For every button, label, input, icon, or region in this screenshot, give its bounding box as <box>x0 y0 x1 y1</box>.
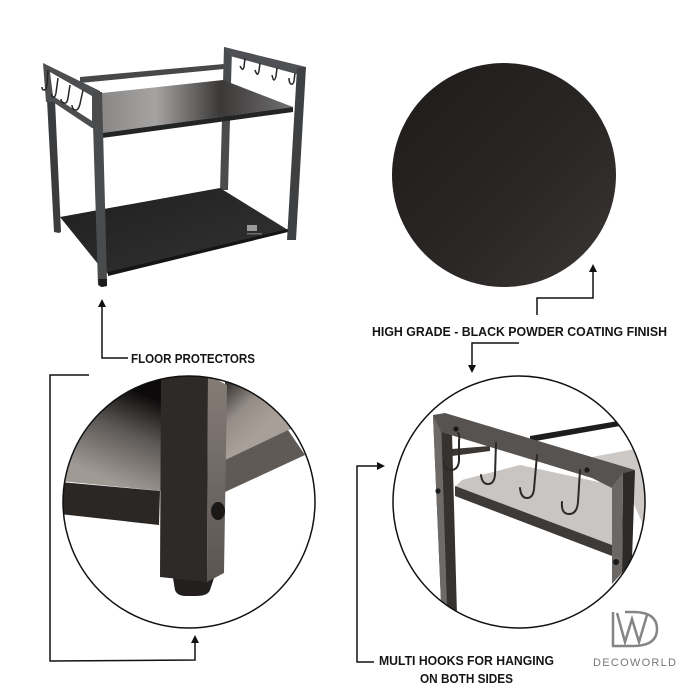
bolts <box>435 426 619 565</box>
back shelf surface <box>592 450 644 523</box>
right post <box>622 470 635 573</box>
bottom shelf <box>60 188 288 274</box>
left post <box>433 415 457 615</box>
circle: hooks detail <box>393 376 650 628</box>
shelf underside <box>66 380 161 491</box>
label: floor protectors: FLOOR PROTECTORS <box>131 352 255 366</box>
left front post <box>92 92 107 287</box>
arrow: coating label to swatch <box>537 271 593 315</box>
hooks <box>444 433 580 514</box>
bolt <box>211 502 225 520</box>
leg foot <box>173 578 214 596</box>
left side frame <box>43 63 100 130</box>
label: multi hooks <box>379 654 554 686</box>
top shelf <box>102 80 293 133</box>
arrow: floor protectors to rack <box>102 306 128 358</box>
shelf bar <box>455 486 612 556</box>
label: high grade coating: HIGH GRADE - BLACK POWDER COATING FINISH <box>372 325 667 339</box>
logo: Decoworld <box>593 612 676 669</box>
back left post <box>47 100 61 233</box>
connector: hooks bracket <box>357 466 378 662</box>
right bar <box>225 430 305 492</box>
circle: black powder coating swatch <box>392 63 616 287</box>
connector: floor protector bracket <box>50 375 195 661</box>
label: multi hooks: ON BOTH SIDES <box>420 672 513 686</box>
shelf front edge <box>60 482 160 525</box>
arrow: coating label to hooks detail <box>472 343 519 366</box>
hooks <box>42 58 295 110</box>
logo: Decoworld: DECOWORLD <box>593 657 676 669</box>
logo on bottom shelf <box>247 225 257 231</box>
label: multi hooks: MULTI HOOKS FOR HANGING <box>379 654 554 668</box>
back right post <box>220 47 232 190</box>
right side frame <box>224 47 306 76</box>
leg side face <box>207 375 227 582</box>
back rail <box>530 421 620 442</box>
leg front face <box>160 375 208 582</box>
right front post <box>287 67 306 240</box>
back rail <box>80 64 224 83</box>
circle: floor protector detail <box>60 370 320 628</box>
top bar <box>433 413 635 488</box>
product photo: two-tier rack <box>42 47 306 287</box>
